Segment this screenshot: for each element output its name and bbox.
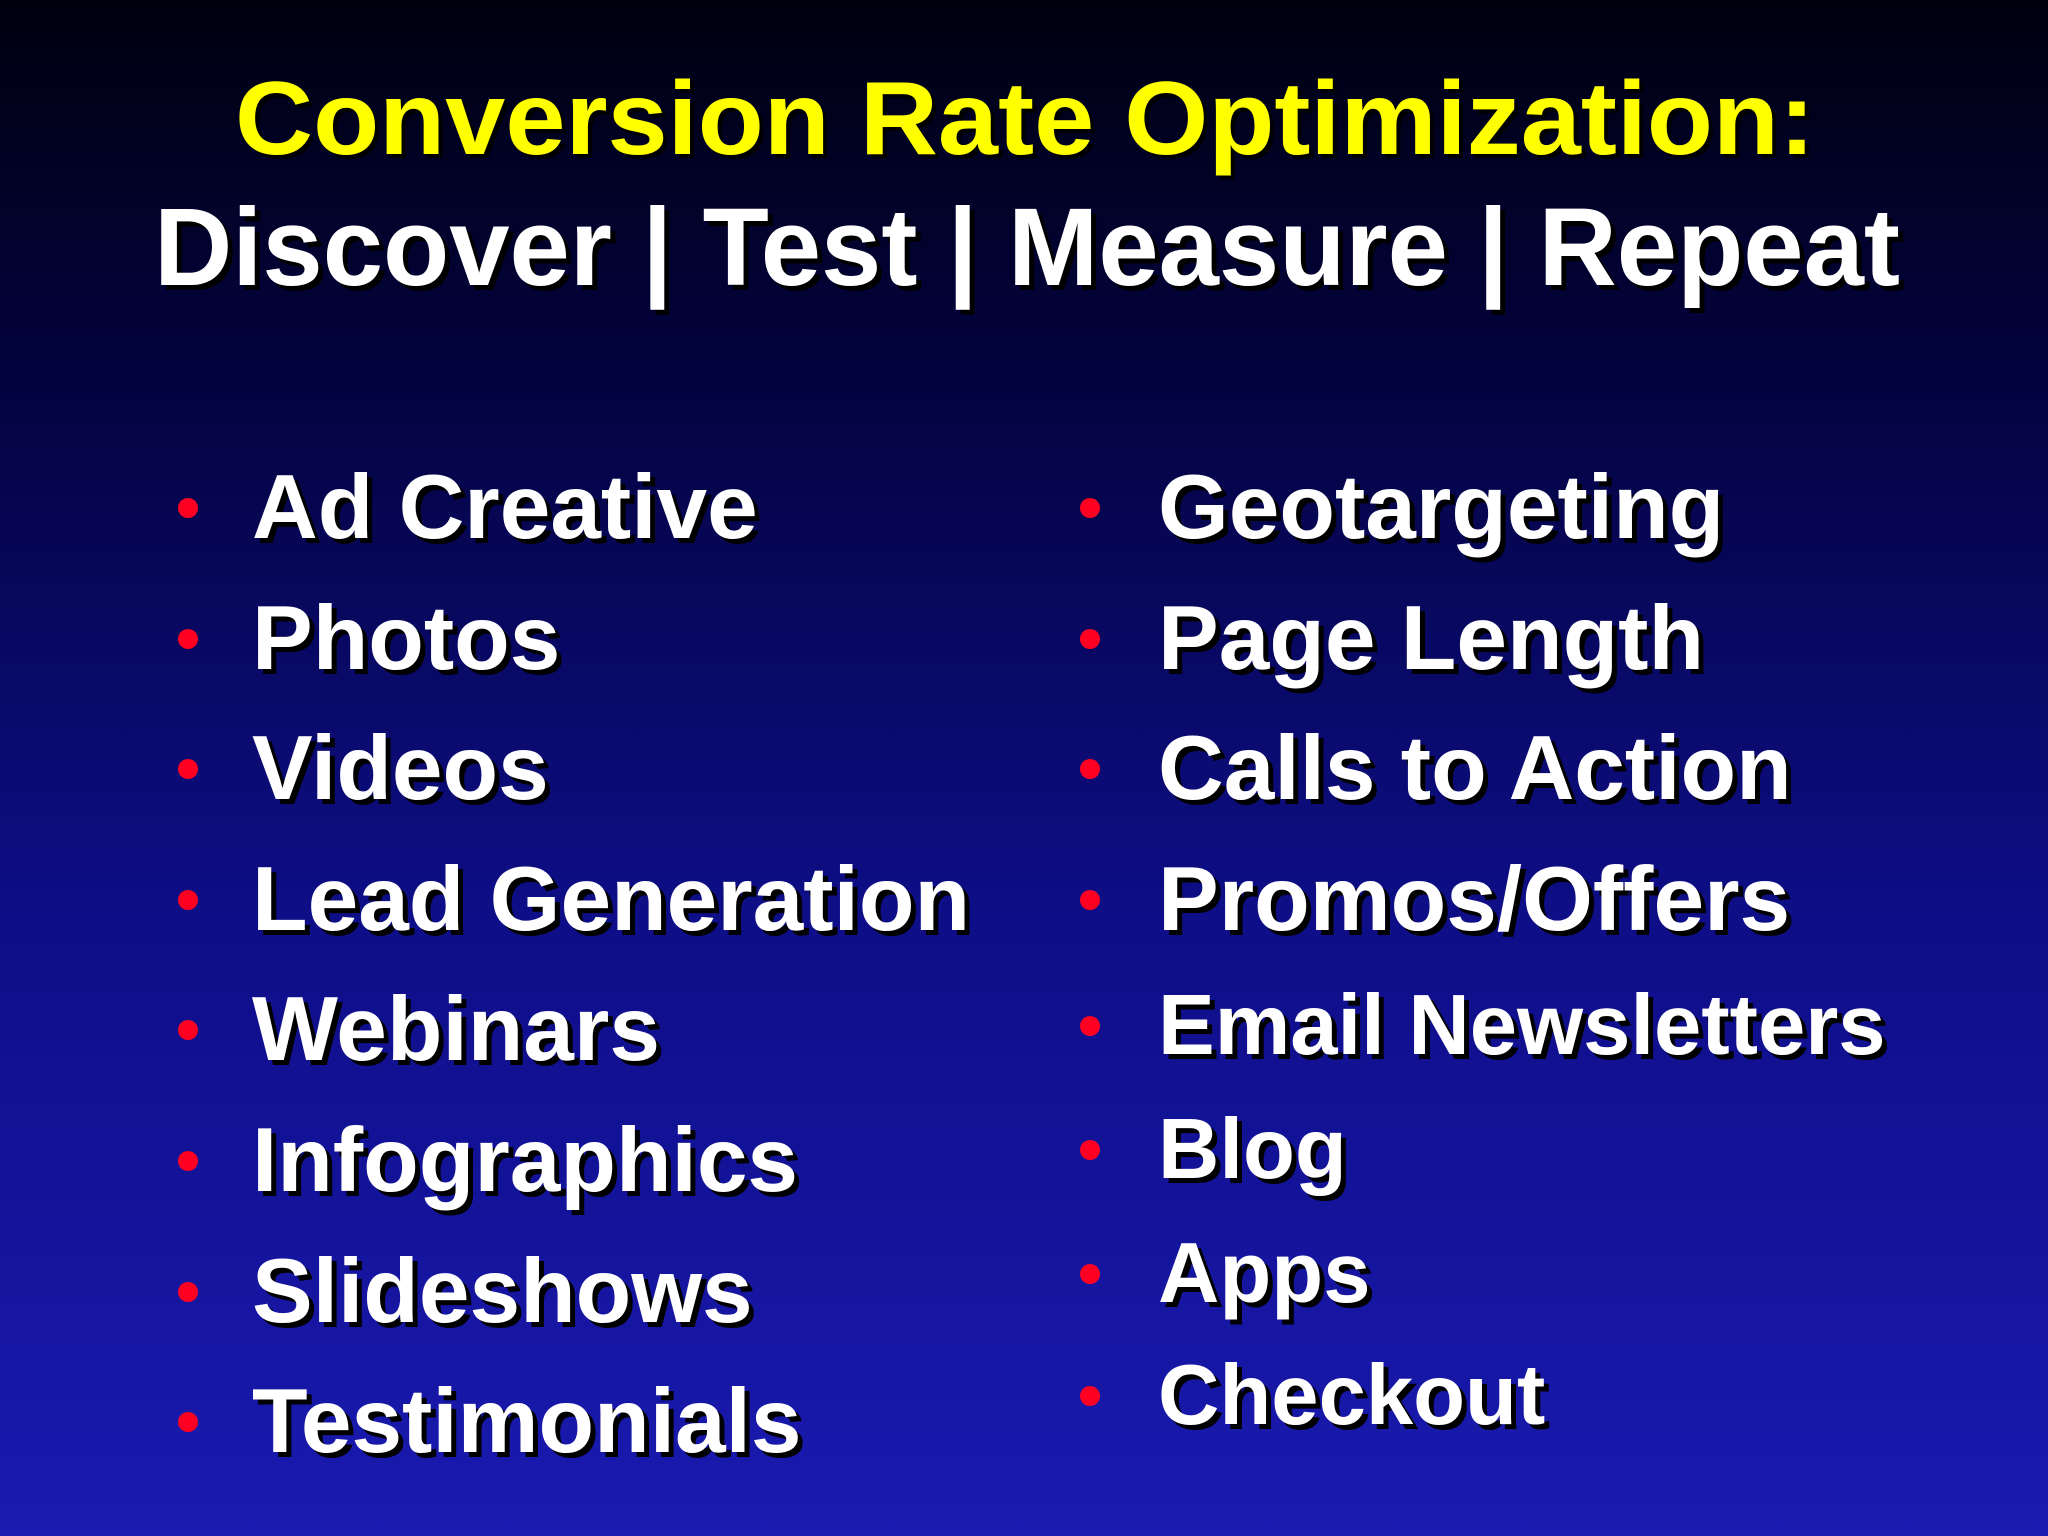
subtitle: Discover | Test | Measure | Repeat bbox=[159, 191, 1905, 315]
list: left column: Photos bbox=[257, 593, 565, 694]
list: right column: Calls to Action bbox=[1158, 718, 1792, 819]
list: left column: Infographics bbox=[252, 1110, 798, 1211]
list: right column: Geotargeting bbox=[1158, 457, 1724, 558]
list: left column: Webinars bbox=[252, 979, 660, 1080]
list: left column: Photos bbox=[252, 588, 560, 689]
title: Conversion Rate Optimization: bbox=[239, 65, 1819, 181]
list: right column: Calls to Action bbox=[1163, 723, 1797, 824]
title: Conversion Rate Optimization: bbox=[235, 61, 1815, 177]
list: right column: Blog bbox=[1163, 1107, 1352, 1202]
list: right column: Checkout bbox=[1163, 1353, 1550, 1448]
list: left column: Videos bbox=[252, 718, 549, 819]
list: left column: Testimonials bbox=[257, 1376, 807, 1477]
list: right column: Promos/Offers bbox=[1158, 849, 1790, 950]
list: right column: Promos/Offers bbox=[1163, 854, 1795, 955]
list: left column: Ad Creative bbox=[257, 462, 763, 563]
list: right column: Checkout bbox=[1158, 1348, 1545, 1443]
list: right column: Email Newsletters bbox=[1163, 983, 1891, 1078]
list: left column: Testimonials bbox=[252, 1371, 802, 1472]
list: left column: Videos bbox=[257, 723, 554, 824]
list: left column: Lead Generation bbox=[257, 854, 975, 955]
list: right column: Blog bbox=[1158, 1102, 1347, 1197]
list: right column: Geotargeting bbox=[1163, 462, 1729, 563]
list: left column: Slideshows bbox=[257, 1246, 758, 1347]
list: right column bbox=[1080, 457, 1891, 1448]
list: right column: Apps bbox=[1163, 1231, 1376, 1326]
subtitle: Discover | Test | Measure | Repeat bbox=[154, 186, 1900, 310]
list: right column: Page Length bbox=[1163, 593, 1709, 694]
list: right column: Email Newsletters bbox=[1158, 978, 1886, 1073]
list: right column: Apps bbox=[1158, 1226, 1370, 1321]
list: right column: Page Length bbox=[1158, 588, 1704, 689]
list: left column: Webinars bbox=[257, 984, 665, 1085]
list: left column: Lead Generation bbox=[252, 849, 970, 950]
list: left column: Infographics bbox=[257, 1115, 803, 1216]
list: left column: Ad Creative bbox=[252, 457, 758, 558]
list: left column bbox=[178, 457, 975, 1477]
list: left column: Slideshows bbox=[252, 1241, 753, 1342]
